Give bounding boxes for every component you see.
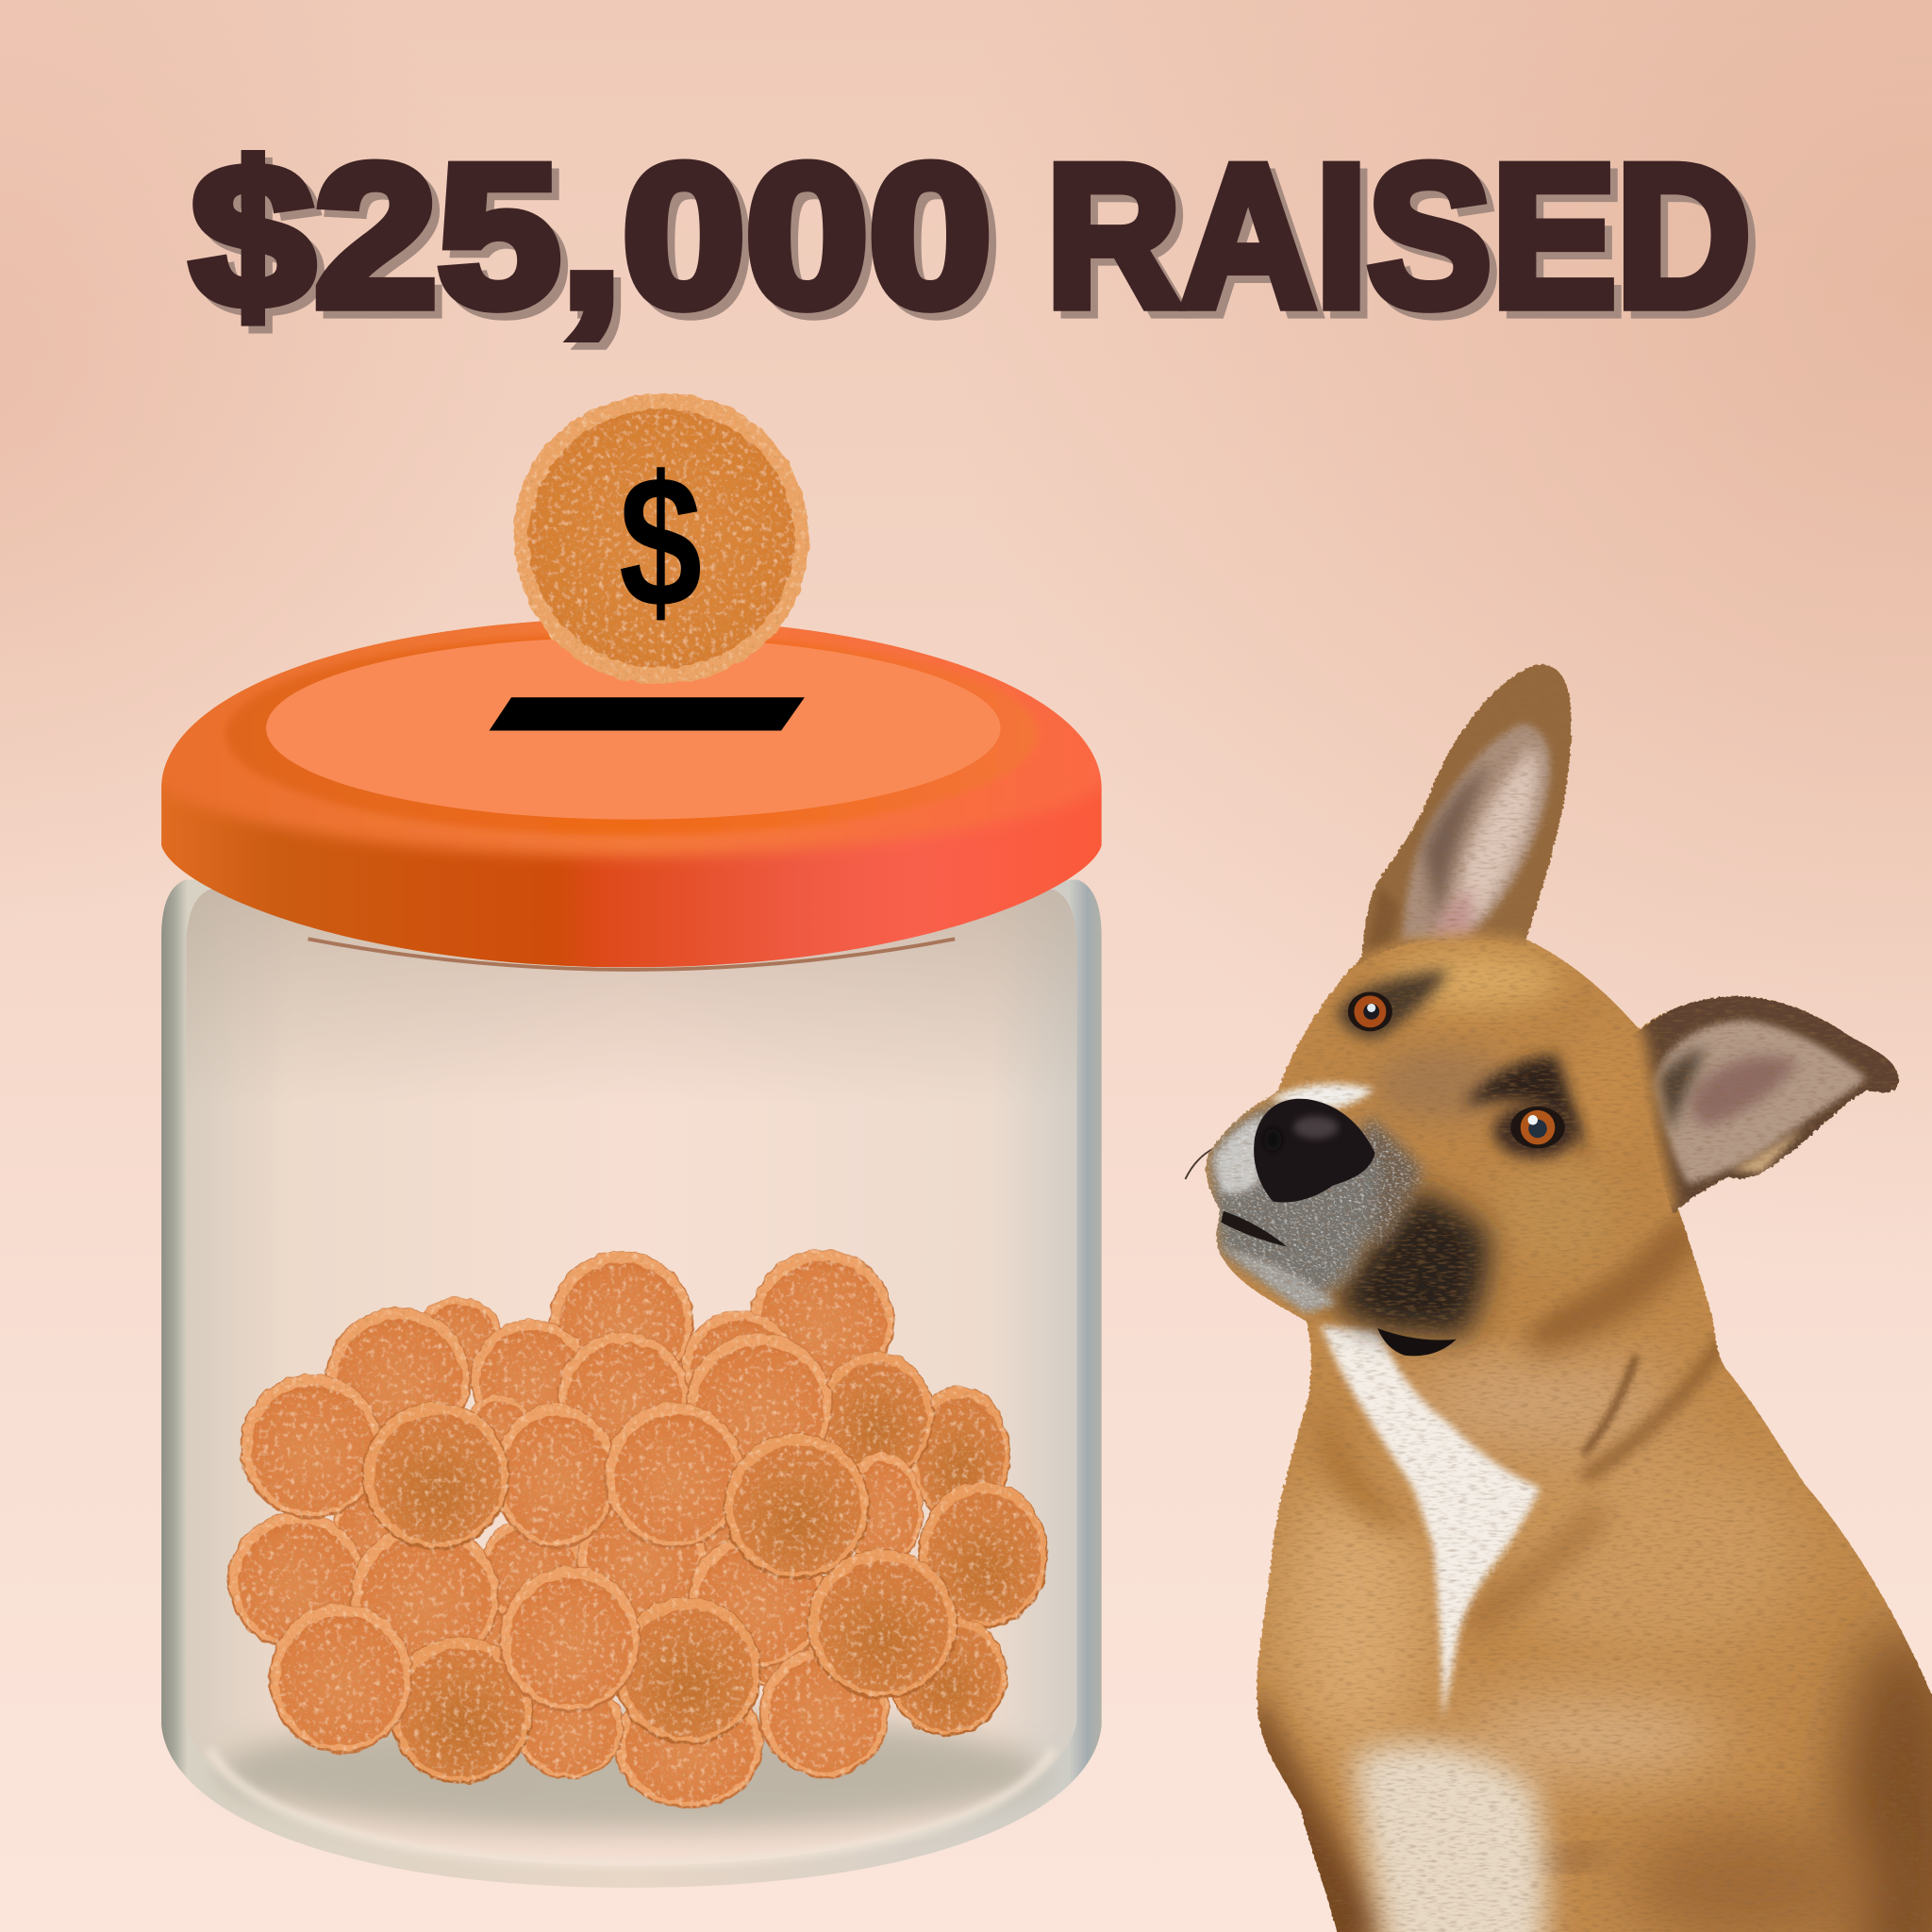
lid top rim [148,604,1115,857]
glass jar [161,880,1102,1888]
coin slot [490,697,805,731]
right ear [1633,996,1904,1214]
title: RAISED [1054,131,1758,357]
dog body shading [1244,1220,1932,1932]
pile of treats in jar [228,1249,1049,1808]
lid panel [266,637,1001,820]
lid side [161,619,1102,967]
dog fur figure [1171,653,1932,1932]
whisker [1185,1148,1214,1179]
eyebrow markings [1337,970,1590,1164]
dark mask [1331,1189,1490,1337]
jar lid [148,604,1115,970]
jar upper shading [187,890,1077,1058]
title: $25,000 [198,131,999,357]
dog [1171,653,1932,1932]
left ear [1356,664,1577,967]
white neck and chest [1321,1324,1546,1932]
jar bottom shadow [218,1713,1043,1831]
left eye [1348,991,1392,1031]
falling treat coin [514,393,808,684]
right eye [1510,1107,1565,1148]
mouth [1221,1211,1288,1247]
nose blaze [1269,1084,1374,1109]
jar outer wall [161,880,1102,1888]
jar inner surface [186,890,1077,1865]
chin shadow [1377,1328,1457,1356]
lid seal line [308,939,955,970]
treat [514,393,808,684]
dollar sign: $ [619,438,702,647]
head [1208,937,1678,1341]
lid groove [225,633,1039,836]
nose [1254,1099,1375,1202]
title: RAISED [1046,124,1751,349]
lid top surface [148,604,1115,857]
title: $25,000 [191,124,991,349]
title [191,124,1758,357]
dog base fur [1171,653,1932,1932]
muzzle [1208,1103,1424,1312]
jar bottom rim highlight [209,1750,1054,1863]
